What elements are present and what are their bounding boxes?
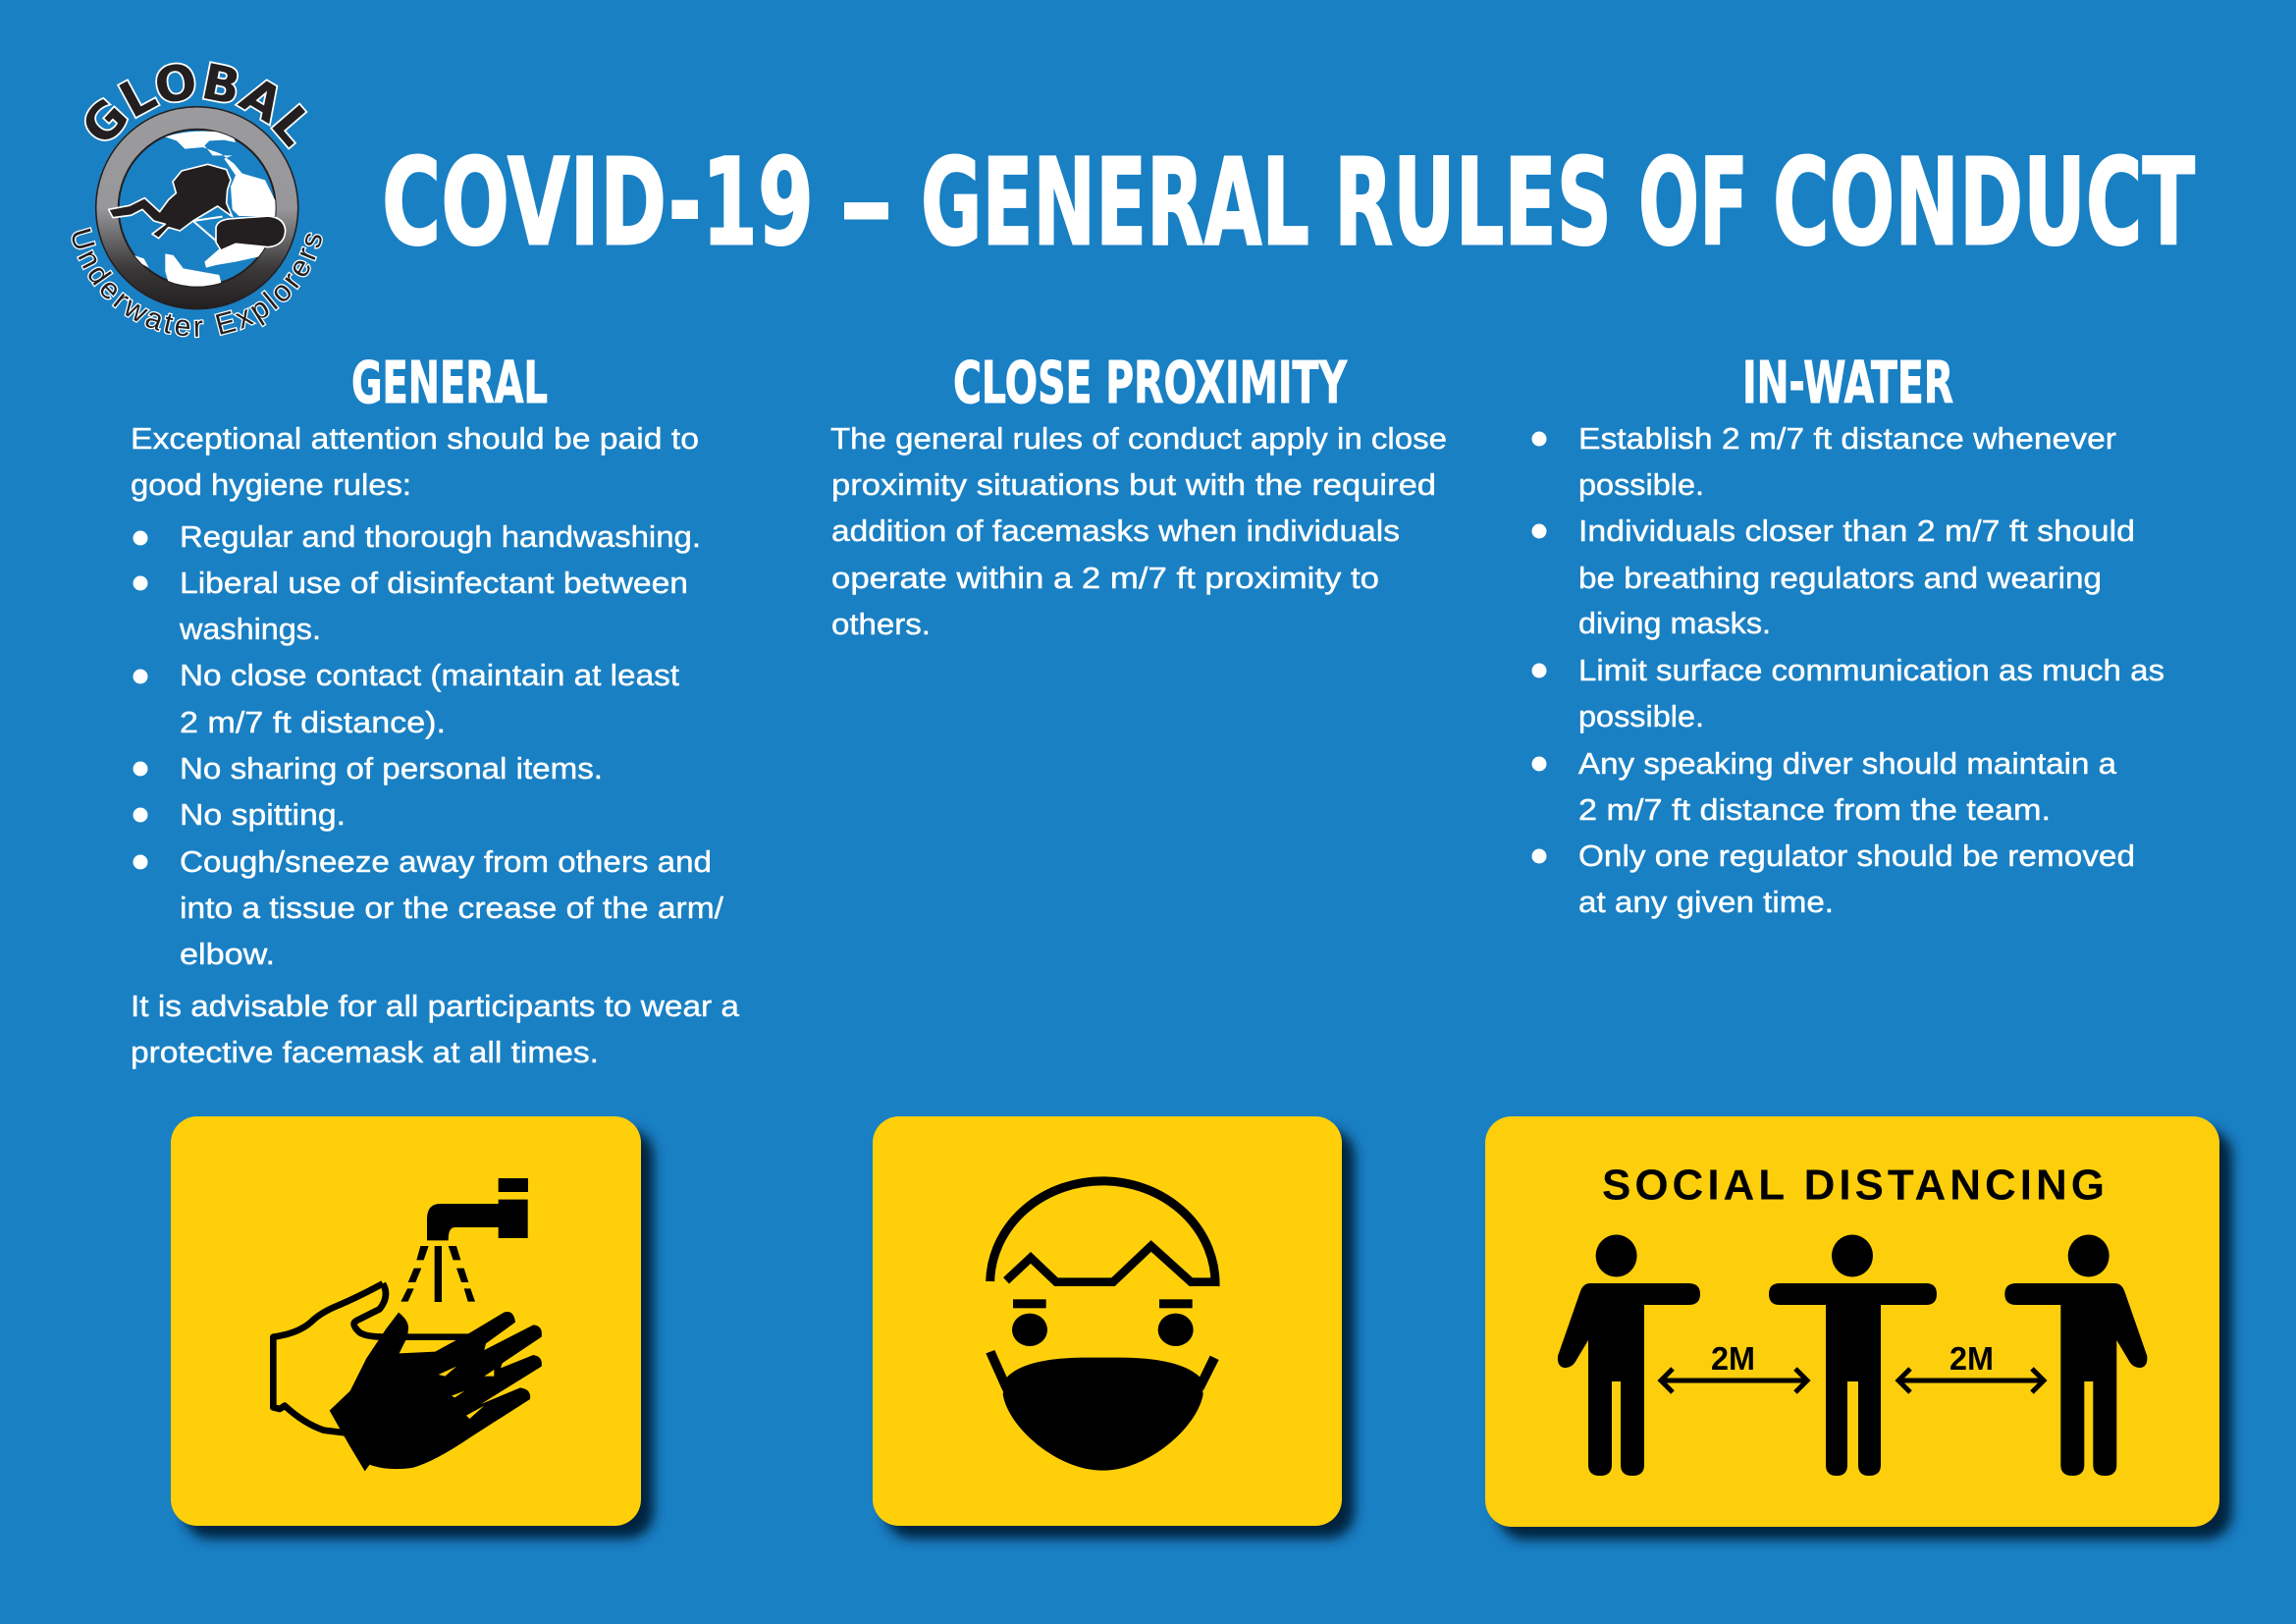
logo: Global Underwater Explorers [71, 61, 323, 338]
text block: general rules: No close contact (maintain at least [180, 658, 679, 692]
arrow: left 2M distance: 2M [1711, 1340, 1755, 1377]
text block: close proximity rules: addition of facemasks when individuals [831, 514, 1400, 548]
icon: left person [1558, 1235, 1700, 1476]
title: GENERAL [921, 134, 1309, 273]
logo text: Underwater Explorers: Underwater Explorers [71, 227, 323, 338]
panel: in-water [1531, 349, 2164, 919]
text block: general rules: elbow. [180, 937, 275, 971]
text block: general rules: Exceptional attention should be paid to [131, 421, 699, 456]
text block: general rules: It is advisable for all participants to wear a [131, 989, 740, 1023]
panel: facemask sign [873, 1116, 1355, 1539]
text block: general rules: good hygiene rules: [131, 467, 411, 502]
heading: general: GENERAL [351, 349, 548, 416]
text block: general rules: 2 m/7 ft distance). [180, 705, 446, 739]
text block: in-water rules: Any speaking diver should maintain a [1578, 746, 2117, 781]
icon: face with mask [986, 1181, 1219, 1471]
text block: in-water rules: Establish 2 m/7 ft distance whenever [1578, 421, 2116, 456]
text block: general rules: protective facemask at all times. [131, 1035, 599, 1069]
title [382, 134, 2195, 273]
icon: centre person [1769, 1235, 1937, 1476]
text block: general rules: washings. [179, 612, 321, 646]
heading: close proximity: CLOSE PROXIMITY [953, 349, 1348, 416]
text block: general rules: into a tissue or the crease of the arm/ [180, 891, 723, 925]
logo text: GLOBAL: GLOBAL [84, 61, 308, 150]
text block: close proximity rules: proximity situations but with the required [831, 467, 1436, 502]
panel: close proximity [830, 349, 1447, 641]
text block: general rules: No sharing of personal items. [180, 751, 603, 785]
icon: right person [2004, 1235, 2147, 1476]
title: RULES [1334, 134, 1612, 273]
text block: in-water rules: Individuals closer than 2 m/7 ft should [1578, 514, 2135, 548]
text block: in-water rules: possible. [1578, 467, 1704, 502]
text block: in-water rules: diving masks. [1578, 606, 1771, 640]
icon: tap and washing hands [273, 1178, 542, 1471]
text block: general rules: No spitting. [180, 797, 346, 832]
panel: general [131, 349, 740, 1069]
text block: in-water rules: possible. [1578, 699, 1704, 733]
text block: close proximity rules [830, 421, 1447, 641]
panel: handwashing sign [171, 1116, 654, 1539]
title: – [839, 134, 893, 273]
text block: general rules: Liberal use of disinfectant between [180, 566, 688, 600]
text block: general rules [131, 421, 740, 1069]
text block: close proximity rules: The general rules of conduct apply in close [830, 421, 1447, 456]
arrow: right 2M distance: 2M [1949, 1340, 1994, 1377]
arrow: left 2M distance [1661, 1340, 1807, 1392]
logo ring [96, 107, 298, 309]
text block: general rules: Cough/sneeze away from others and [180, 844, 712, 879]
logo globe and diver [109, 132, 286, 288]
text block: in-water rules: at any given time. [1578, 885, 1834, 919]
text block: in-water rules [1531, 421, 2164, 919]
text block: in-water rules: Limit surface communication as much as [1578, 653, 2164, 687]
text block: in-water rules: be breathing regulators and wearing [1578, 561, 2102, 595]
title: OF [1638, 134, 1748, 273]
text block: general rules: Regular and thorough handwashing. [180, 519, 701, 554]
heading: in-water: IN-WATER [1742, 349, 1953, 416]
title: COVID-19 [382, 134, 814, 273]
text block: close proximity rules: operate within a 2 m/7 ft proximity to [831, 561, 1379, 595]
arrow: right 2M distance [1898, 1340, 2044, 1392]
text block: close proximity rules: others. [831, 607, 931, 641]
panel: social distancing sign [1485, 1116, 2232, 1540]
text block: in-water rules: Only one regulator should be removed [1578, 839, 2135, 873]
text block: in-water rules: 2 m/7 ft distance from the team. [1578, 792, 2051, 827]
heading: social distancing: SOCIAL DISTANCING [1602, 1161, 2105, 1210]
